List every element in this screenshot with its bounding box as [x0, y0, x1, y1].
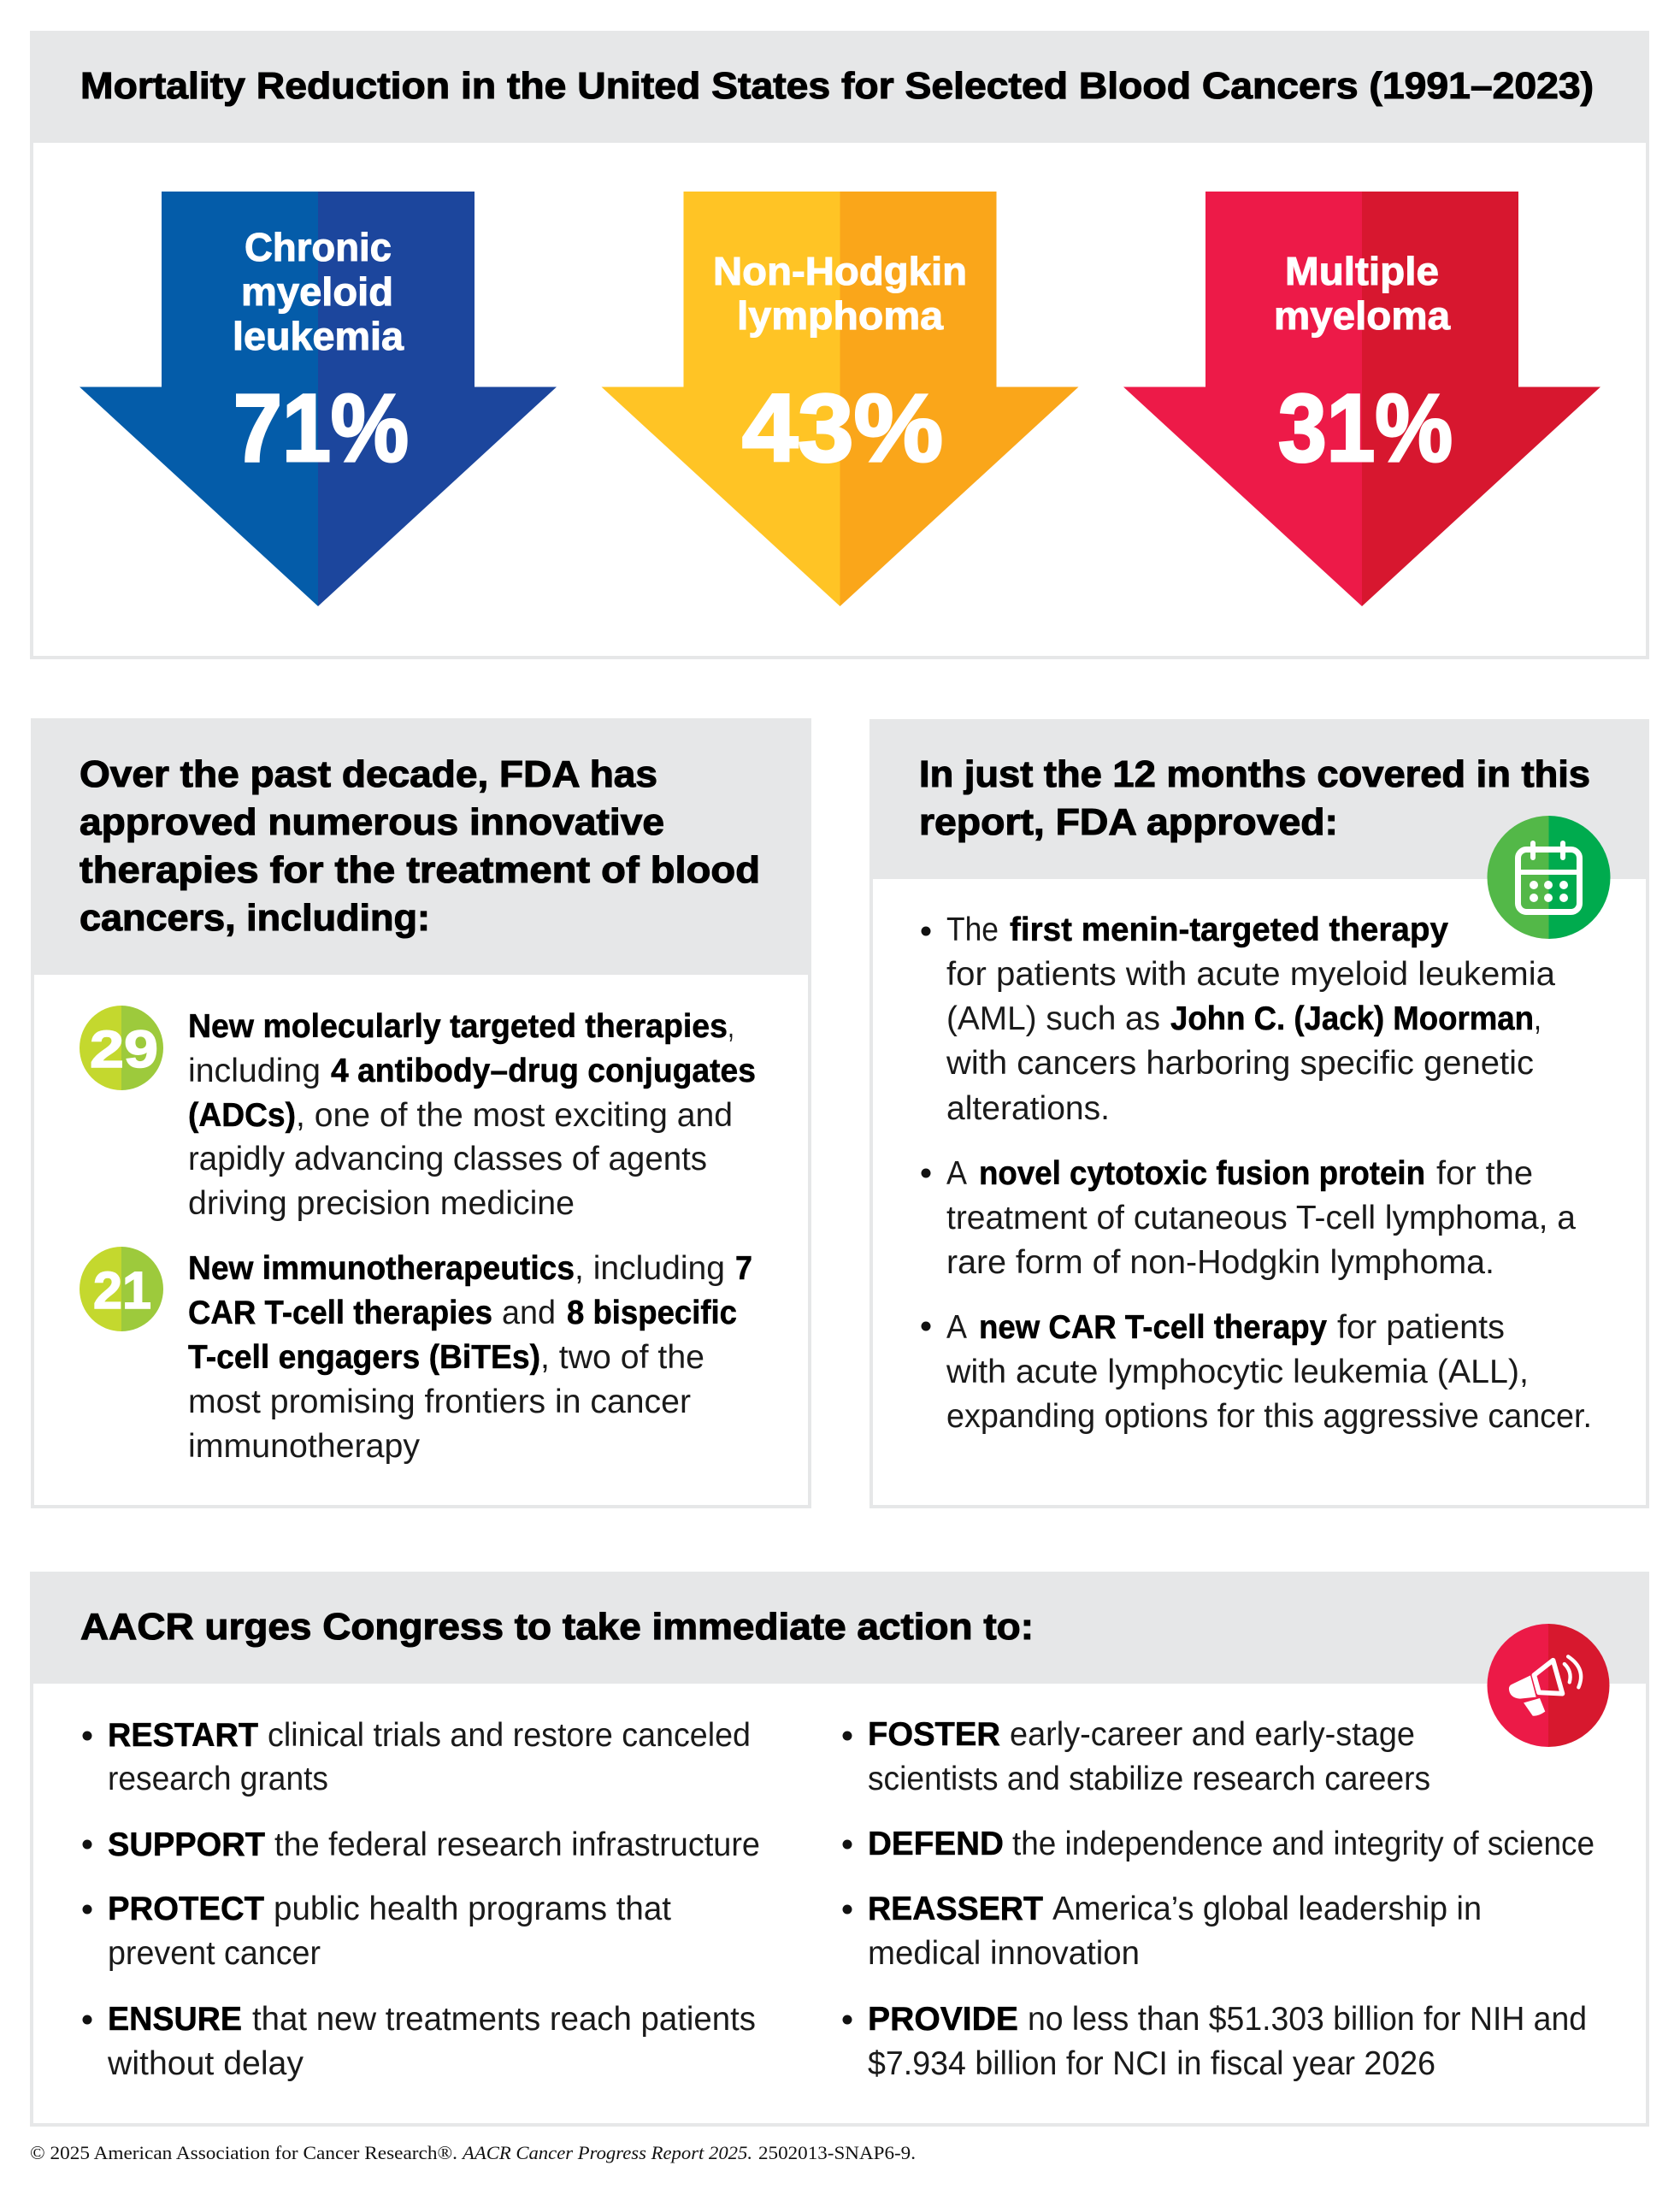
bullet: foster: scientists and stabilize research careers	[868, 1761, 1430, 1797]
bullet: reassert: REASSERT	[868, 1891, 1043, 1927]
bullet: menin-targeted therapy: The	[946, 912, 999, 948]
text: immunotherapeutics: T-cell engagers (BiTEs)	[188, 1339, 540, 1376]
bullet: protect: PROTECT	[108, 1891, 264, 1927]
bullet: defend: the independence and integrity of science	[1012, 1826, 1595, 1862]
heading: 12 months: report, FDA approved:	[919, 801, 1338, 843]
bullet: cytotoxic fusion protein: for the	[1436, 1155, 1533, 1192]
bullet: CAR T-cell therapy: expanding options for this aggressive cancer.	[946, 1398, 1592, 1435]
arrow: chronic myeloid leukemia 71%: 71%	[233, 375, 409, 481]
text: targeted therapies: New molecularly targeted therapies	[188, 1008, 728, 1045]
bullet: foster: early-career and early-stage	[1010, 1716, 1415, 1753]
bullet: CAR T-cell therapy: new CAR T-cell therapy	[979, 1309, 1328, 1346]
arrow: chronic myeloid leukemia 71%: Chronic	[245, 225, 392, 269]
arrow: multiple myeloma 31%: 31%	[1278, 375, 1453, 481]
bullet: defend: DEFEND	[868, 1826, 1004, 1862]
footer: copyright: AACR Cancer Progress Report 2025.	[461, 2142, 752, 2163]
heading: 12 months: In just the 12 months covered in this	[919, 753, 1590, 795]
badge: 21: 21	[93, 1261, 151, 1319]
bullet: cytotoxic fusion protein: A	[946, 1155, 967, 1192]
text: immunotherapeutics: , two of the	[540, 1339, 704, 1376]
bullet: ensure: that new treatments reach patients	[252, 2001, 756, 2038]
bullet: menin-targeted therapy: alterations.	[946, 1090, 1110, 1127]
bullet: protect	[82, 1891, 671, 1972]
bullet: CAR T-cell therapy: A	[946, 1309, 967, 1346]
bullet: menin-targeted therapy: first menin-targeted therapy	[1010, 912, 1449, 948]
arrow: chronic myeloid leukemia 71%: leukemia	[233, 314, 404, 358]
heading: past decade	[80, 753, 760, 939]
icon: calendar	[1488, 816, 1611, 939]
arrow: chronic myeloid leukemia 71%	[80, 192, 557, 606]
text: targeted therapies: rapidly advancing classes of agents	[188, 1141, 707, 1177]
text: targeted therapies: ,	[728, 1008, 734, 1045]
text: immunotherapeutics: CAR T-cell therapies	[188, 1295, 492, 1331]
bullet: provide: $7.934 billion for NCI in fiscal year 2026	[868, 2045, 1435, 2082]
panel: decade of FDA approvals	[31, 719, 811, 1507]
bullet: protect: public health programs that	[274, 1891, 671, 1927]
badge: 29	[80, 1006, 163, 1090]
panel: mortality reduction	[30, 31, 1649, 658]
text: immunotherapeutics: most promising frontiers in cancer	[188, 1384, 691, 1420]
text: targeted therapies: (ADCs)	[188, 1097, 296, 1134]
bullet: ensure: without delay	[107, 2045, 304, 2082]
text: targeted therapies	[188, 1008, 756, 1222]
text: targeted therapies: 4 antibody–drug conjugates	[331, 1053, 756, 1089]
bullet: menin-targeted therapy: with cancers harboring specific genetic	[946, 1045, 1534, 1082]
bullet: CAR T-cell therapy: for patients	[1337, 1309, 1505, 1346]
bullet: ensure: ENSURE	[108, 2001, 242, 2038]
footer: copyright	[30, 2142, 916, 2163]
text: immunotherapeutics	[188, 1250, 752, 1465]
text: targeted therapies: driving precision medicine	[188, 1185, 575, 1222]
bullet: restart	[82, 1717, 751, 1797]
arrow: non-hodgkin lymphoma 43%	[602, 192, 1079, 606]
heading: past decade: therapies for the treatment of blood	[80, 849, 760, 891]
bullet: menin-targeted therapy: for patients with acute myeloid leukemia	[946, 956, 1556, 993]
bullet: restart: research grants	[108, 1761, 328, 1797]
text: immunotherapeutics: and	[502, 1295, 556, 1331]
arrow: multiple myeloma 31%: myeloma	[1274, 293, 1450, 338]
text: targeted therapies: , one of the most exciting and	[296, 1097, 733, 1134]
bullet: reassert: America’s global leadership in	[1052, 1891, 1482, 1927]
bullet: provide: PROVIDE	[868, 2001, 1018, 2038]
arrow: multiple myeloma 31%	[1123, 192, 1600, 606]
text: immunotherapeutics: 8 bispecific	[567, 1295, 737, 1331]
arrow: chronic myeloid leukemia 71%: myeloid	[241, 269, 393, 314]
text: targeted therapies: including	[188, 1053, 321, 1089]
bullet: support: the federal research infrastructure	[274, 1826, 760, 1863]
bullet: menin-targeted therapy	[922, 912, 1556, 1127]
bullet: cytotoxic fusion protein: rare form of non-Hodgkin lymphoma.	[946, 1244, 1494, 1281]
bullet: reassert	[843, 1891, 1482, 1972]
arrow: multiple myeloma 31%: Multiple	[1285, 249, 1439, 293]
bullet: foster: FOSTER	[868, 1716, 1000, 1753]
bullet: foster	[843, 1716, 1430, 1797]
heading: 12 months	[919, 753, 1590, 843]
bullet: restart: clinical trials and restore canceled	[268, 1717, 751, 1754]
bullet: provide: no less than $51.303 billion for NIH and	[1028, 2001, 1587, 2038]
bullet: menin-targeted therapy: (AML) such as	[946, 1000, 1160, 1037]
footer: copyright: 2502013-SNAP6-9.	[758, 2142, 916, 2163]
bullet: CAR T-cell therapy	[922, 1309, 1592, 1435]
icon: megaphone	[1488, 1624, 1609, 1747]
heading: past decade: cancers, including:	[80, 897, 430, 939]
heading: past decade: approved numerous innovative	[80, 801, 664, 843]
bullet: reassert: medical innovation	[868, 1935, 1140, 1972]
heading: congress: AACR urges Congress to take immediate action to:	[80, 1606, 1034, 1648]
bullet: restart: RESTART	[108, 1717, 258, 1754]
text: immunotherapeutics: immunotherapy	[188, 1428, 421, 1465]
bullet: cytotoxic fusion protein: novel cytotoxic fusion protein	[979, 1155, 1425, 1192]
panel: 12-month FDA approvals	[869, 719, 1649, 1507]
bullet: menin-targeted therapy: John C. (Jack) Moorman	[1170, 1000, 1534, 1037]
text: immunotherapeutics: 7	[735, 1250, 752, 1287]
panel: AACR urges Congress	[30, 1572, 1649, 2125]
text: immunotherapeutics: New immunotherapeutics	[188, 1250, 575, 1287]
bullet: menin-targeted therapy: ,	[1534, 1000, 1541, 1037]
bullet: CAR T-cell therapy: with acute lymphocytic leukemia (ALL),	[946, 1354, 1529, 1390]
text: immunotherapeutics: , including	[575, 1250, 725, 1287]
badge: 21	[80, 1247, 163, 1331]
arrow: non-hodgkin lymphoma 43%: 43%	[742, 375, 943, 481]
bullet: cytotoxic fusion protein: treatment of cutaneous T-cell lymphoma, a	[946, 1200, 1577, 1236]
heading: past decade: Over the past decade, FDA has	[80, 753, 657, 795]
title: Mortality Reduction in the United States for Selected Blood Cancers (1991–2023)	[80, 65, 1594, 107]
bullet: protect: prevent cancer	[108, 1935, 321, 1972]
arrow: non-hodgkin lymphoma 43%: lymphoma	[737, 293, 943, 338]
bullet: support: SUPPORT	[108, 1826, 265, 1863]
bullet: provide	[843, 2001, 1587, 2082]
bullet: cytotoxic fusion protein	[922, 1155, 1577, 1281]
arrow: non-hodgkin lymphoma 43%: Non-Hodgkin	[713, 249, 967, 293]
badge: 29: 29	[90, 1020, 158, 1078]
bullet: ensure	[82, 2001, 756, 2082]
footer: copyright: © 2025 American Association for Cancer Research®.	[30, 2142, 457, 2163]
